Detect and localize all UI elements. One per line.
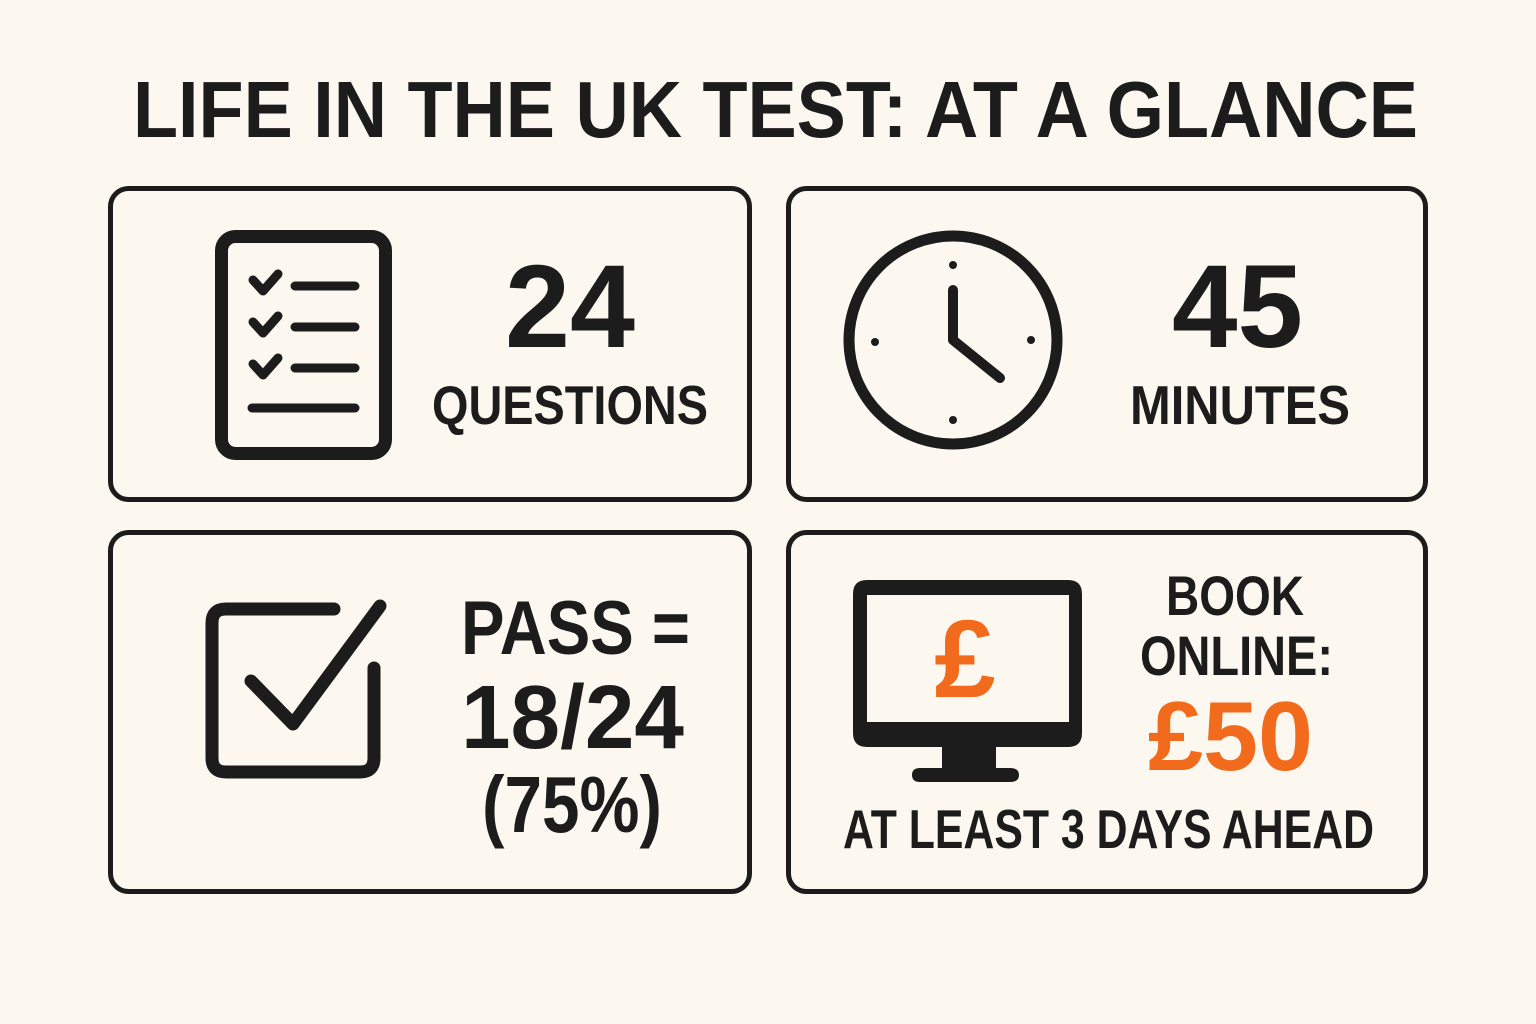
text: pass =: PASS = [461, 586, 690, 671]
number: 24: 24 [505, 241, 635, 373]
label: questions: QUESTIONS [432, 374, 708, 436]
price: £50 [1148, 681, 1313, 791]
icon: clock [849, 236, 1057, 444]
text: 75%: (75%) [482, 760, 662, 849]
label: minutes: MINUTES [1130, 374, 1350, 436]
panel: booking: ONLINE: [1140, 624, 1333, 687]
text: at least 3 days ahead: AT LEAST 3 DAYS AHEAD [843, 798, 1374, 860]
panel: booking [788, 532, 1426, 892]
title: LIFE IN THE UK TEST: AT A GLANCE [133, 65, 1418, 154]
icon: checkbox [212, 606, 380, 772]
text: book online: BOOK [1166, 564, 1304, 627]
number: 45: 45 [1172, 241, 1303, 373]
text: 18/24: 18/24 [461, 668, 684, 768]
panel: questions [110, 188, 750, 500]
icon: monitor with pound: £ [934, 598, 996, 721]
icon: checklist [222, 236, 386, 454]
icon: monitor with pound [853, 580, 1082, 782]
panel: minutes [788, 188, 1426, 500]
panel: pass mark [110, 532, 750, 892]
